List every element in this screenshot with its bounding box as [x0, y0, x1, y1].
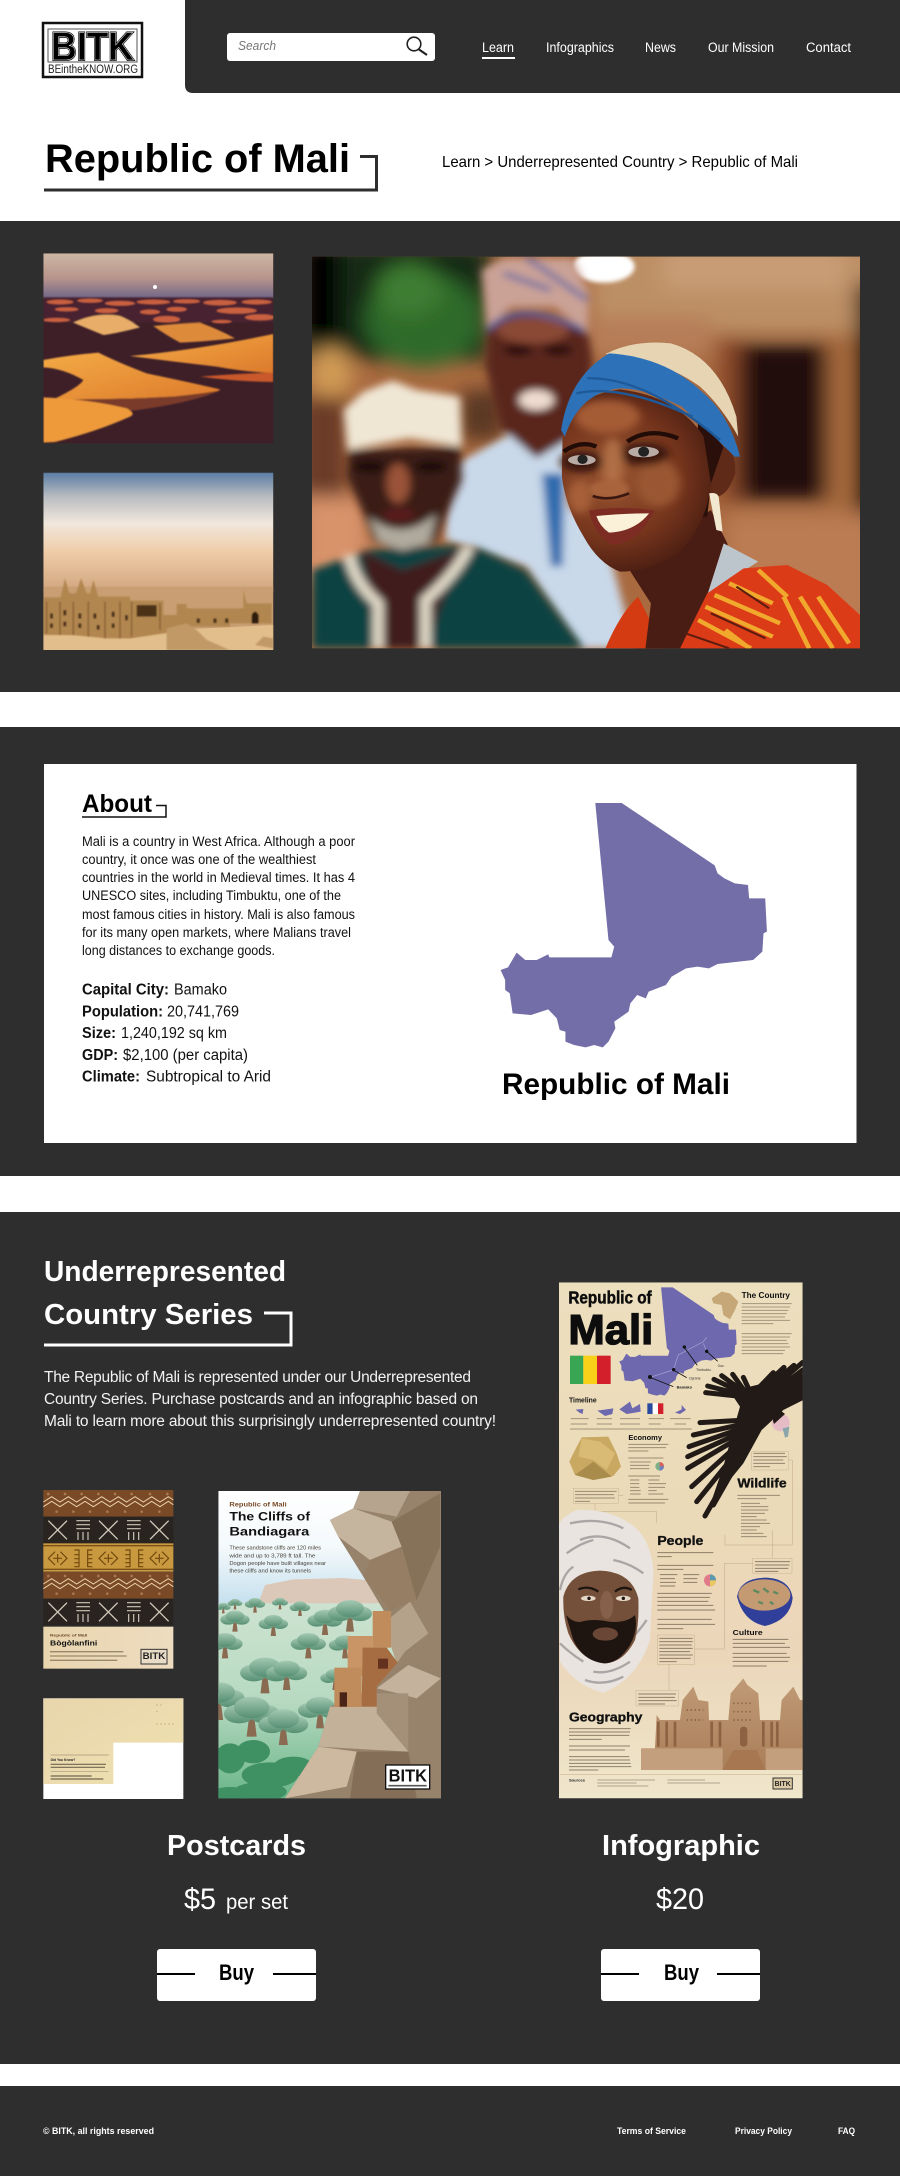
search box: [227, 33, 435, 61]
text: about paragraph: countries in the world in Medieval times. It has 4: [82, 870, 355, 885]
logo: BITK: BEintheKNOW.ORG: [48, 64, 138, 76]
Great Mosque of Djenné: [641, 1678, 803, 1770]
map with cities: [619, 1287, 737, 1396]
gold nugget: [569, 1437, 621, 1480]
text: about paragraph: long distances to exchange goods.: [82, 943, 275, 958]
panel: underrepresented country series: [0, 1212, 900, 2064]
text: about paragraph: for its many open markets, where Malians travel: [82, 925, 351, 940]
product: infographic: [601, 1830, 760, 2001]
timeline: Timeline: [569, 1398, 597, 1405]
nav links: Contact: [806, 40, 851, 55]
postcard front: Bògòlanfini: BITK: [143, 1651, 166, 1661]
postcard back: [43, 1698, 183, 1799]
geography: [569, 1691, 678, 1770]
product: postcards: [157, 1830, 316, 2001]
logo: BITK: BITK: [51, 25, 134, 69]
poster logo: BITK: [389, 1766, 427, 1786]
vulture: [688, 1362, 803, 1516]
sources: Sources: [569, 1779, 585, 1783]
mini Africa: [712, 1292, 738, 1319]
page title: Republic of Mali: [45, 137, 350, 181]
navigation bar: [185, 0, 900, 93]
poster title: Mali: [568, 1307, 653, 1353]
man in front: [312, 381, 584, 648]
man in background: [445, 257, 635, 648]
buy button: Buy: [219, 1960, 255, 1985]
panel: photo gallery: [0, 221, 900, 692]
people: People: [657, 1533, 703, 1548]
nav links: Learn: [482, 40, 514, 55]
poster text: Republic of Mali: [229, 1502, 287, 1509]
poster title: [569, 1290, 652, 1346]
timeline: [569, 1398, 692, 1429]
culture: Culture: [733, 1628, 763, 1637]
heading: series: Underrepresented: [44, 1256, 286, 1288]
text: country facts: Size:: [82, 1025, 116, 1042]
postcard back: Did You Know?: [51, 1758, 75, 1762]
people: [657, 1530, 772, 1690]
poster: The Cliffs of Bandiagara: The Cliffs of: [229, 1510, 311, 1524]
text: country facts: [82, 982, 271, 1086]
cliff dwellings: [334, 1611, 398, 1707]
footer: Privacy Policy: [735, 2126, 793, 2137]
product: postcards: $5: [184, 1883, 216, 1916]
panel: about: [0, 727, 900, 1176]
map with cities: Timbuktu: [696, 1368, 711, 1372]
poster: The Cliffs of Bandiagara: these cliffs and know its tunnels: [229, 1569, 311, 1575]
text: series description: Mali to learn more about this surprisingly underrepresented country!: [44, 1413, 496, 1430]
text: series description: [44, 1369, 496, 1430]
wildlife: [725, 1452, 792, 1545]
text: series description: Country Series. Purchase postcards and an infographic based on: [44, 1391, 478, 1408]
sources: BITK: [775, 1779, 791, 1788]
buy button: [601, 1949, 760, 2001]
culture: [733, 1558, 793, 1666]
text: about paragraph: country, it once was one of the wealthiest: [82, 852, 316, 867]
breadcrumb: Learn > Underrepresented Country > Republic of Mali: [442, 154, 798, 171]
flag of Mali: [570, 1356, 611, 1384]
photo: three smiling people: [300, 243, 882, 648]
poster: The Cliffs of Bandiagara: Dogon people have built villages near: [229, 1561, 326, 1567]
infographic poster: [559, 1282, 803, 1798]
lower half of poster: [559, 1510, 803, 1789]
nav links: Our Mission: [708, 40, 774, 55]
poster title: Republic of: [568, 1287, 652, 1307]
heading: series: Country Series: [44, 1299, 253, 1331]
text: about paragraph: UNESCO sites, including Timbuktu, one of the: [82, 888, 341, 903]
map with cities: Bamako: [677, 1385, 693, 1390]
heading: series: [44, 1256, 291, 1345]
photo: desert dunes: [43, 253, 275, 443]
postcard front: Bògòlanfini: Bògòlanfini: [50, 1638, 97, 1647]
text: country facts: 1,240,192 sq km: [121, 1025, 227, 1042]
text: country facts: Climate:: [82, 1068, 140, 1086]
poster: The Cliffs of Bandiagara: Bandiagara: [229, 1525, 309, 1539]
postcard front: Bògòlanfini: [43, 1490, 173, 1669]
portrait of a man in a turban: [559, 1510, 653, 1693]
trees: [218, 1598, 372, 1745]
economy: [573, 1433, 668, 1523]
heading: The Country: [742, 1291, 792, 1354]
text: about paragraph: Mali is a country in West Africa. Although a poor: [82, 834, 355, 849]
postcard front: Bògòlanfini: Republic of Mali: [50, 1633, 87, 1638]
text: about paragraph: most famous cities in history. Mali is also famous: [82, 907, 355, 922]
heading: The Country: The Country: [742, 1291, 791, 1300]
map of Mali: [501, 803, 767, 1047]
nav links: Infographics: [546, 40, 614, 55]
footer: FAQ: [838, 2126, 855, 2137]
poster: The Cliffs of Bandiagara: [218, 1491, 441, 1798]
buy button: [157, 1949, 316, 2001]
footer: Terms of Service: [617, 2126, 686, 2137]
product: infographic: Infographic: [602, 1830, 760, 1862]
text: country facts: Subtropical to Arid: [146, 1068, 271, 1086]
background: blurred village: [312, 256, 860, 615]
text: country facts: GDP:: [82, 1047, 118, 1064]
footer: [0, 2086, 900, 2176]
text: about paragraph: [82, 834, 355, 958]
geography: Geography: [569, 1711, 642, 1725]
wildlife: Wildlife: [737, 1475, 787, 1490]
heading: About: About: [82, 790, 153, 818]
footer: © BITK, all rights reserved: [43, 2126, 154, 2137]
product: infographic: $20: [656, 1883, 704, 1916]
poster: The Cliffs of Bandiagara: wide and up to 3,789 ft tall. The: [229, 1553, 315, 1559]
search box: Search: [238, 38, 276, 53]
map with cities: Djenné: [689, 1376, 701, 1380]
text: country facts: Population:: [82, 1004, 163, 1020]
map with cities: Gao: [718, 1364, 724, 1368]
nav links: [482, 40, 851, 59]
text: country facts: 20,741,769: [167, 1004, 239, 1020]
nav links: News: [645, 40, 676, 55]
map label: Republic of Mali: [502, 1068, 730, 1101]
economy: Economy: [628, 1433, 663, 1442]
product: postcards: per set: [226, 1891, 288, 1914]
header: [43, 0, 900, 93]
cliff rock facets: [285, 1491, 441, 1798]
product: postcards: Postcards: [167, 1830, 306, 1862]
text: country facts: $2,100 (per capita): [123, 1047, 248, 1064]
text: series description: The Republic of Mali is represented under our Underrepresented: [44, 1369, 471, 1386]
text: country facts: Capital City:: [82, 982, 169, 998]
woman in foreground: [560, 342, 860, 648]
logo: BITK: BITK: [51, 25, 134, 69]
foreground bushes: [218, 1740, 310, 1798]
text: country facts: Bamako: [174, 982, 227, 998]
sources: [560, 1774, 802, 1789]
buy button: Buy: [664, 1960, 700, 1985]
poster: The Cliffs of Bandiagara: These sandstone cliffs are 120 miles: [229, 1546, 321, 1552]
photo: mud-brick city: [43, 473, 273, 650]
